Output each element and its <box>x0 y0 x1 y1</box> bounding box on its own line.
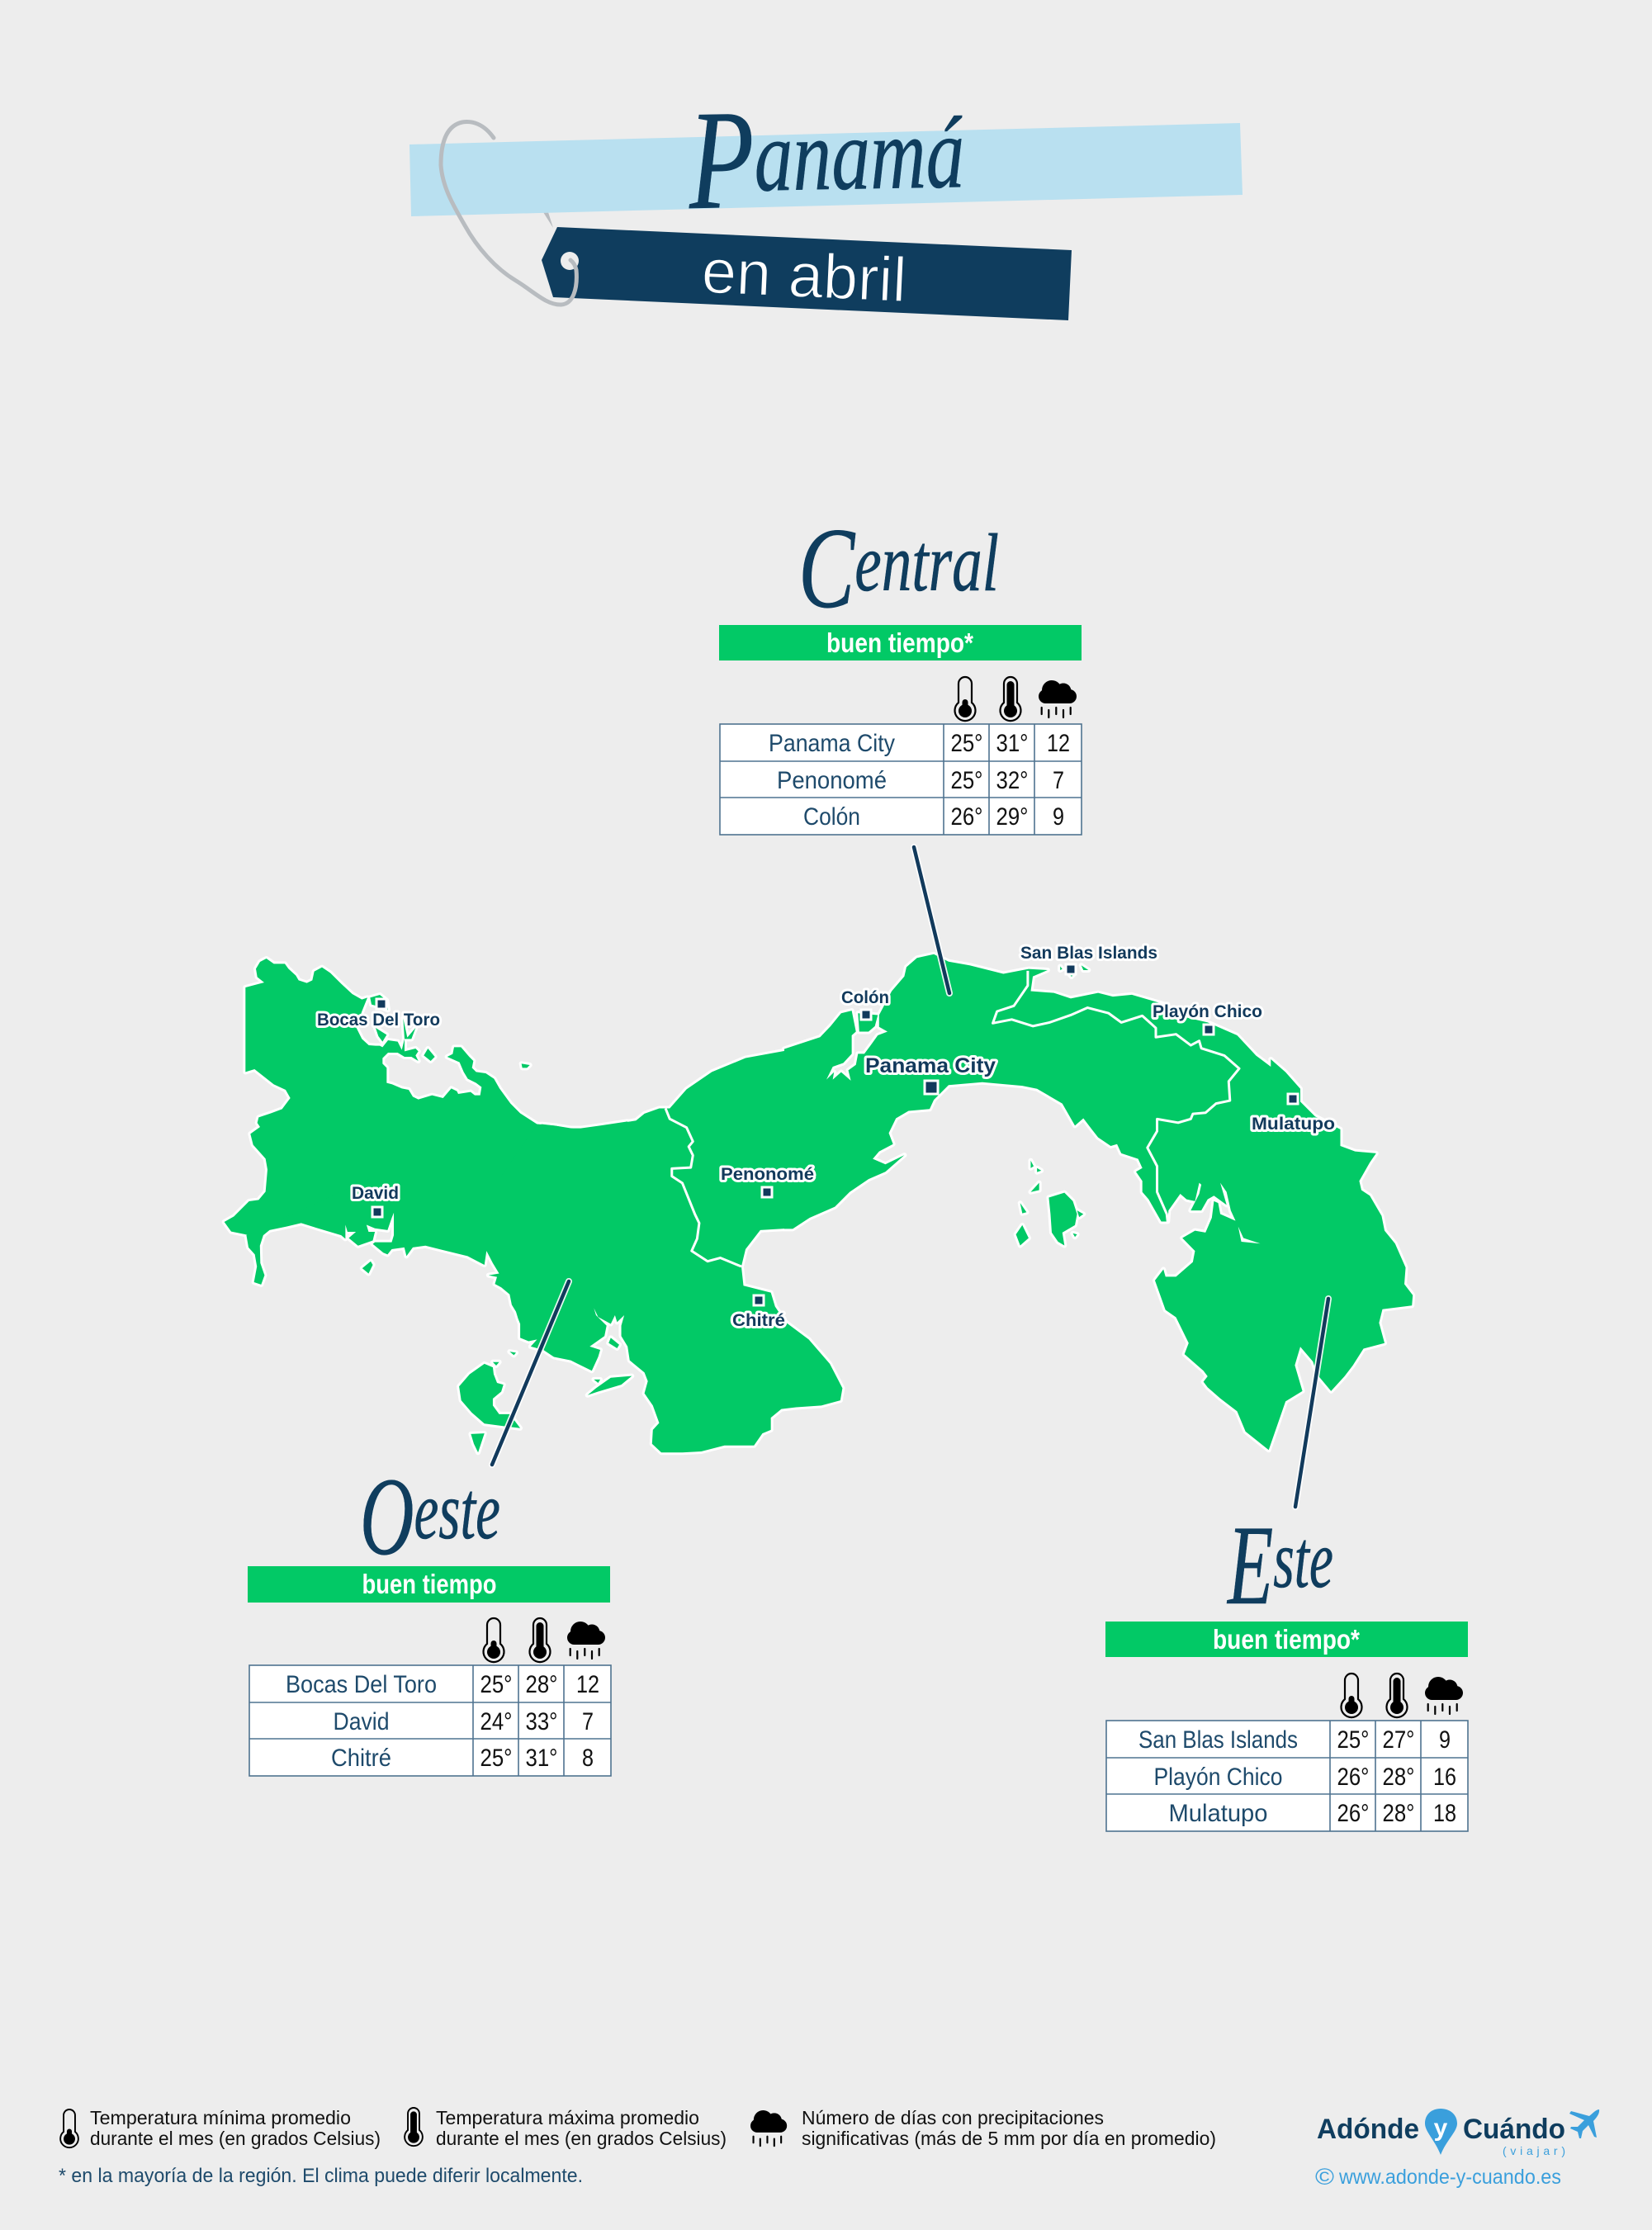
climate table: Penonomé <box>777 767 887 794</box>
climate table: 32° <box>996 767 1029 794</box>
icon: maximum temperature <box>1001 677 1020 721</box>
icon: plane <box>1569 2109 1599 2138</box>
climate table: 24° <box>480 1708 512 1735</box>
city labels: Penonomé <box>721 1165 814 1184</box>
climate table: 25° <box>951 730 982 757</box>
icon: minimum temperature <box>1341 1674 1362 1717</box>
panel: oeste <box>248 1456 611 1776</box>
pointer: oeste <box>492 1281 569 1465</box>
city labels: Colón <box>841 988 889 1007</box>
climate table: 25° <box>1337 1726 1369 1754</box>
tag hole <box>561 252 579 270</box>
climate table: Playón Chico <box>1154 1764 1283 1791</box>
icon: minimum temperature <box>954 677 976 721</box>
weather bar <box>248 1566 610 1603</box>
climate table: 12 <box>1047 730 1070 757</box>
map outline <box>225 954 1413 1452</box>
climate table: San Blas Islands <box>1138 1726 1298 1754</box>
climate table: Mulatupo <box>1169 1800 1268 1827</box>
legend: maximum temperature <box>405 2107 727 2149</box>
city labels <box>317 944 1335 1330</box>
logo word: Adónde: Adónde <box>1317 2114 1419 2145</box>
climate table: 25° <box>480 1671 512 1698</box>
weather bar <box>1105 1622 1468 1657</box>
heading: Central: C <box>798 504 855 632</box>
climate table: 33° <box>525 1708 558 1735</box>
legend: rain days: Número de días con precipitaciones <box>802 2107 1104 2128</box>
icon: rain <box>567 1622 605 1659</box>
weather bar: buen tiempo* <box>1213 1624 1360 1655</box>
icon: map pin <box>1425 2109 1457 2155</box>
climate table: 31° <box>996 730 1029 757</box>
legend: maximum temperature: durante el mes (en grados Celsius) <box>436 2128 727 2149</box>
climate table: Panama City <box>769 730 895 757</box>
legend: minimum temperature: Temperatura mínima promedio <box>90 2107 351 2128</box>
region borders <box>665 971 1239 1267</box>
climate table: 16 <box>1433 1764 1456 1791</box>
heading: Oeste: este <box>414 1465 500 1556</box>
climate table: 7 <box>1053 767 1064 794</box>
logo word: Cuándo: Cuándo <box>1463 2114 1565 2145</box>
icon: minimum temperature <box>484 1618 504 1662</box>
website: www.adonde-y-cuando.es <box>1338 2166 1561 2189</box>
climate table: Colón <box>803 803 860 831</box>
climate table: 25° <box>951 767 982 794</box>
climate table: 26° <box>951 803 982 831</box>
climate table: 9 <box>1053 803 1064 831</box>
logo tagline: ( v i a j a r ) <box>1503 2144 1565 2157</box>
icon: maximum temperature <box>1387 1674 1407 1717</box>
climate table: 12 <box>576 1671 599 1698</box>
legend: maximum temperature: Temperatura máxima promedio <box>436 2107 699 2128</box>
map fill <box>225 954 1413 1452</box>
title: Panamá: anamá <box>753 96 965 213</box>
icon: rain <box>1039 680 1077 717</box>
heading: Oeste: O <box>360 1456 414 1579</box>
panel: este <box>1105 1502 1468 1831</box>
heading: Central: entral <box>854 517 999 608</box>
climate table: 27° <box>1382 1726 1415 1754</box>
climate table: 29° <box>996 803 1029 831</box>
climate table <box>720 724 1082 835</box>
pointer: este <box>1295 1299 1328 1507</box>
climate table: David <box>334 1708 390 1735</box>
title band <box>409 123 1243 216</box>
city labels: Playón Chico <box>1153 1002 1262 1021</box>
city markers <box>372 964 1298 1305</box>
climate table: 28° <box>525 1671 558 1698</box>
legend: rain days: significativas (más de 5 mm por día en promedio) <box>802 2128 1216 2149</box>
legend: minimum temperature: durante el mes (en grados Celsius) <box>90 2128 381 2149</box>
climate table: 8 <box>582 1745 594 1772</box>
city labels: Bocas Del Toro <box>317 1011 440 1030</box>
website: © <box>1315 2164 1334 2190</box>
icon: maximum temperature <box>530 1618 550 1662</box>
city labels: David <box>352 1184 399 1203</box>
legend: minimum temperature <box>60 2107 381 2149</box>
heading: Este: ste <box>1273 1513 1333 1605</box>
climate table: 26° <box>1337 1764 1369 1791</box>
title: Panamá: P <box>687 82 755 239</box>
title block <box>409 78 1243 320</box>
weather bar: buen tiempo <box>362 1569 497 1599</box>
climate table <box>249 1665 611 1776</box>
climate table: 28° <box>1382 1800 1415 1827</box>
luggage tag <box>542 227 1072 320</box>
heading: Este: E <box>1227 1502 1273 1628</box>
climate table: 9 <box>1439 1726 1451 1754</box>
icon: rain <box>1425 1677 1463 1714</box>
climate table: 18 <box>1433 1800 1456 1827</box>
climate table: Bocas Del Toro <box>286 1671 437 1698</box>
climate table: 26° <box>1337 1800 1369 1827</box>
map of Panama <box>225 944 1413 1452</box>
city labels: Panama City <box>865 1054 996 1077</box>
logo <box>1315 2109 1599 2190</box>
ring thread <box>543 212 553 228</box>
footnote: * en la mayoría de la región. El clima puede diferir localmente. <box>59 2165 583 2187</box>
pointer: central <box>914 847 949 993</box>
climate table: 28° <box>1382 1764 1415 1791</box>
weather bar <box>719 625 1082 660</box>
city labels: Chitré <box>732 1311 785 1330</box>
city labels: Mulatupo <box>1252 1115 1335 1134</box>
legend: rain days <box>750 2107 1216 2149</box>
weather bar: buen tiempo* <box>826 627 973 658</box>
icon: map pin: y <box>1434 2114 1448 2142</box>
ring <box>441 122 576 305</box>
climate table: 7 <box>582 1708 594 1735</box>
panel: central <box>719 504 1082 835</box>
climate table: Chitré <box>331 1745 391 1772</box>
city labels: San Blas Islands <box>1020 944 1157 963</box>
legend <box>59 2107 1216 2187</box>
climate table: 25° <box>480 1745 512 1772</box>
climate table: 31° <box>525 1745 558 1772</box>
subtitle: en abril: en abril <box>700 236 908 315</box>
climate table <box>1106 1721 1468 1831</box>
